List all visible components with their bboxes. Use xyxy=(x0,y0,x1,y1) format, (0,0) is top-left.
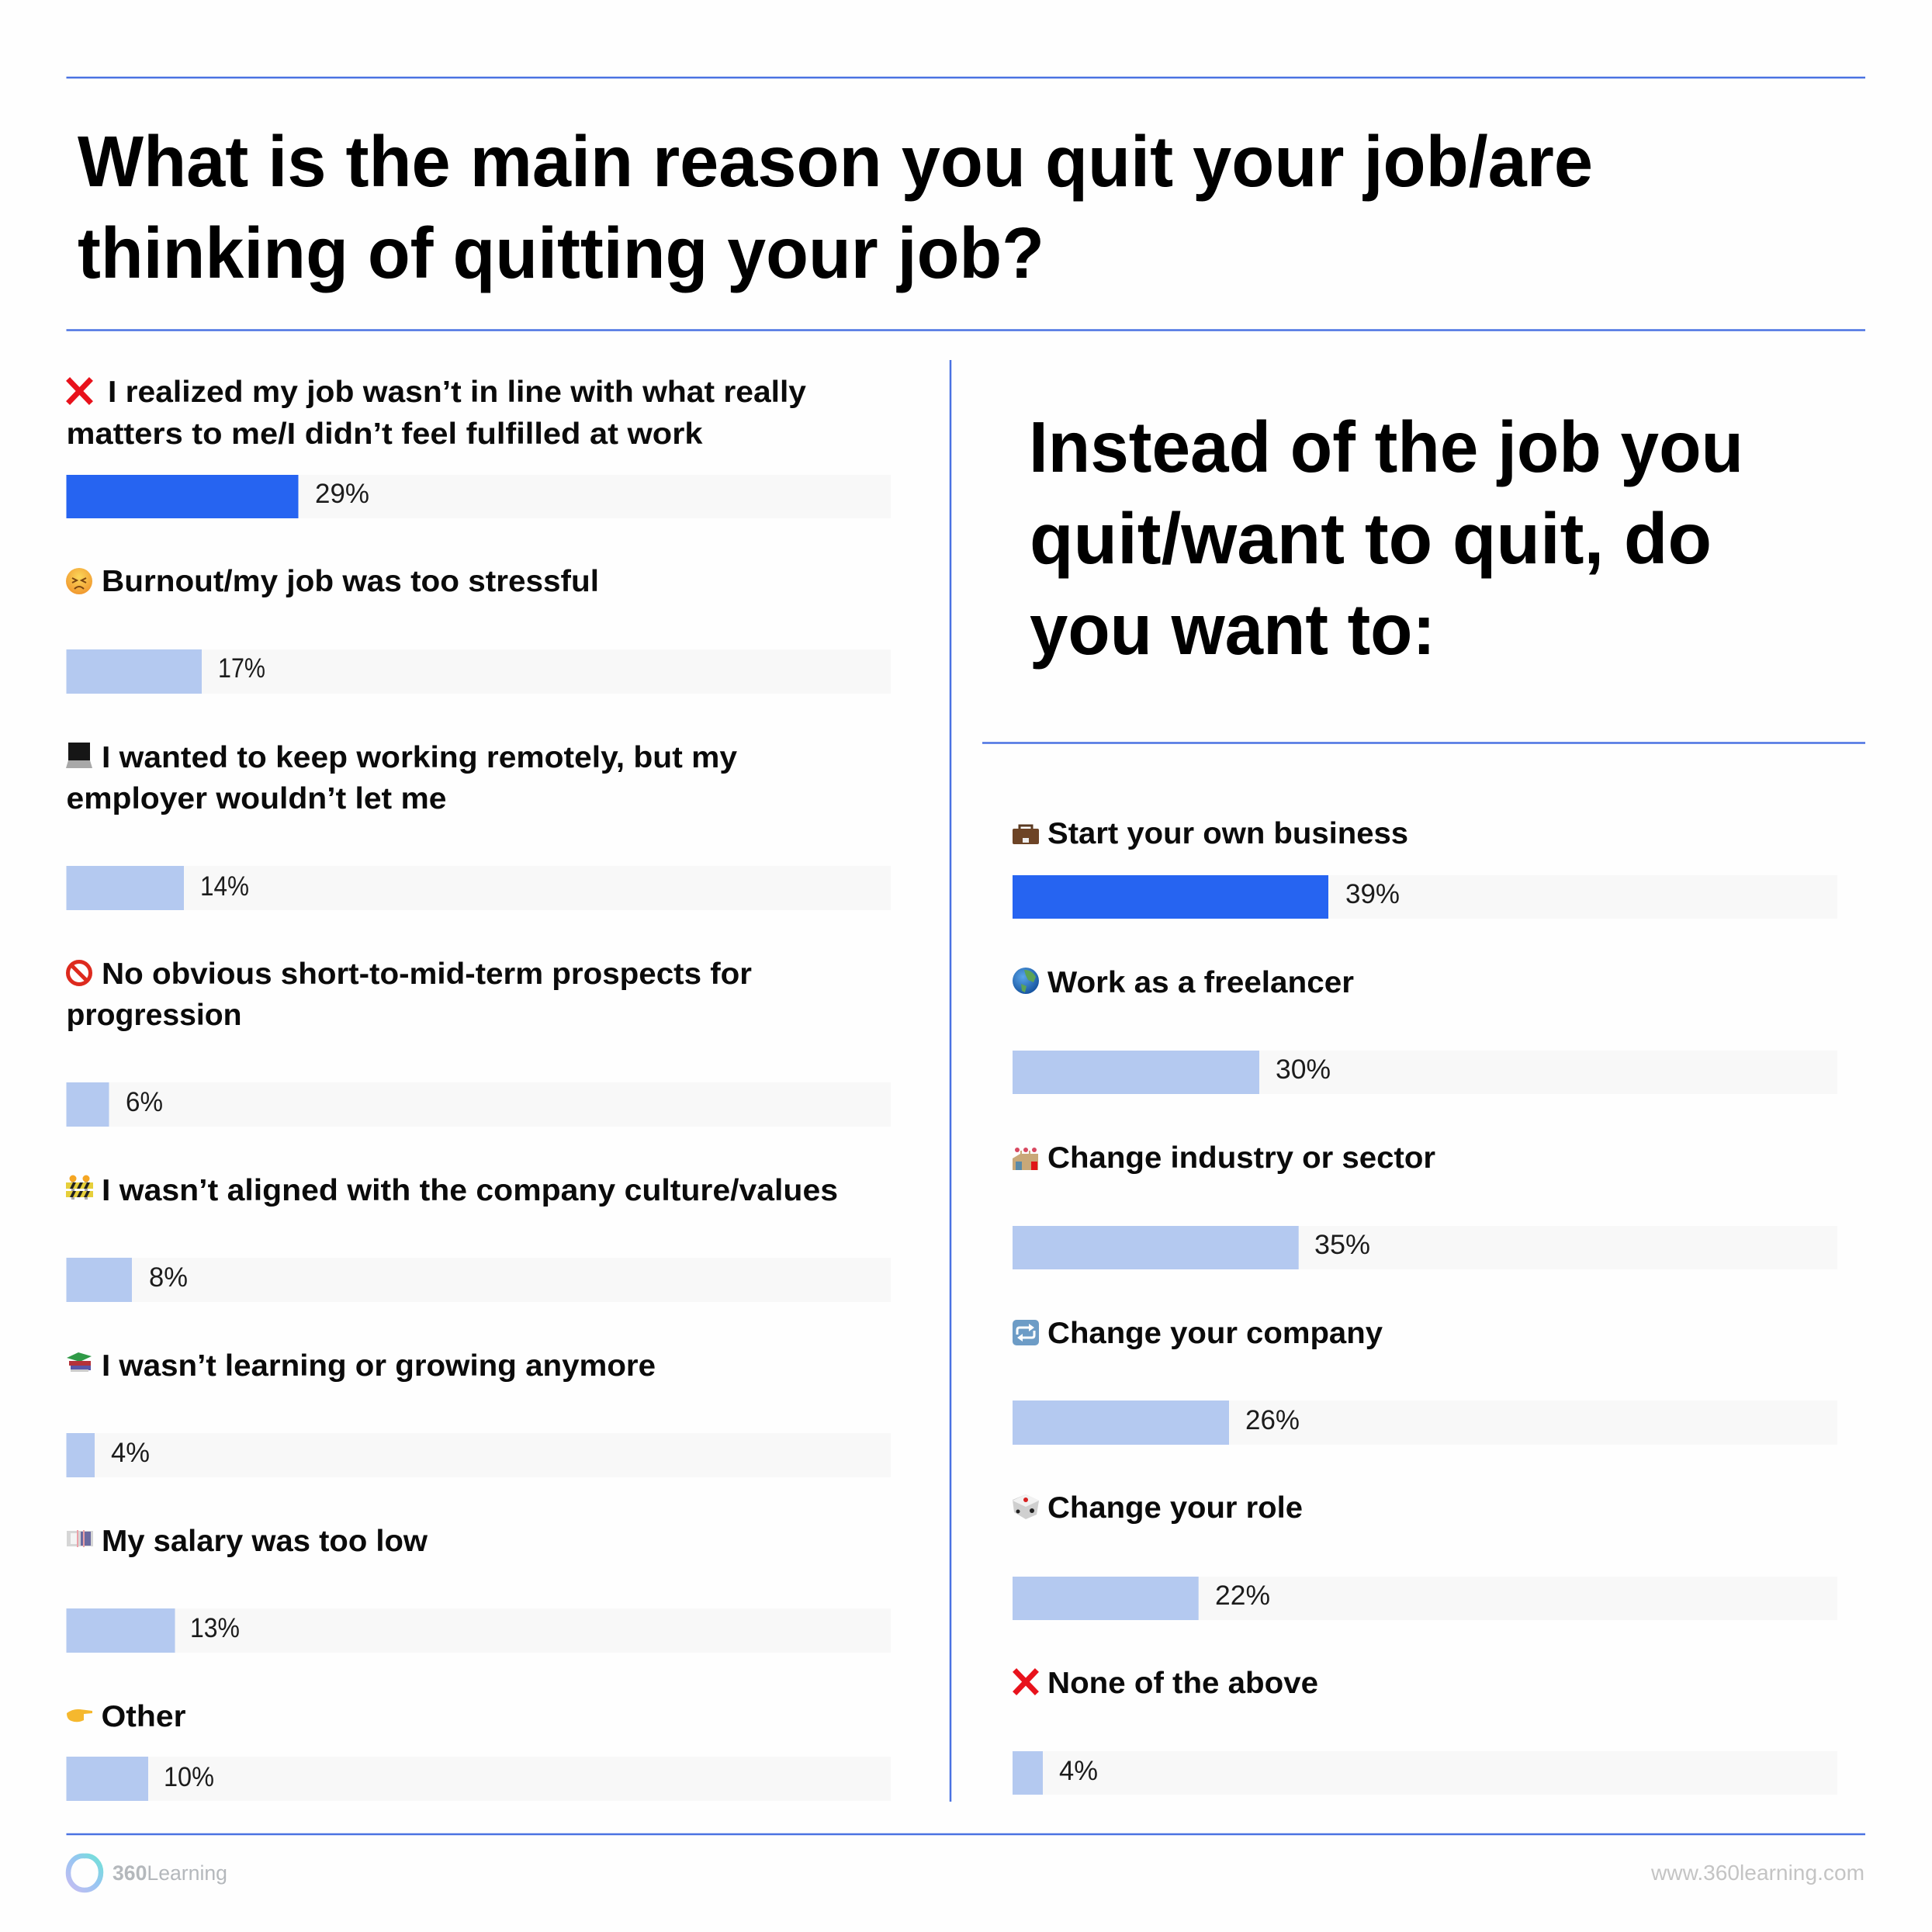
value: 4%: 4% xyxy=(111,1438,150,1468)
row: salary 13% xyxy=(67,1525,891,1653)
label: salary: My salary was too low xyxy=(102,1525,428,1558)
icon: stack of books xyxy=(67,1352,92,1372)
icon: laptop xyxy=(66,743,92,768)
icon: banknotes xyxy=(67,1530,93,1547)
bar: 4% xyxy=(1013,1751,1837,1795)
value: 4%: 4% xyxy=(1059,1756,1098,1786)
value: 13%: 13% xyxy=(190,1613,240,1643)
label: no progression: No obvious short-to-mid-term prospects for xyxy=(102,957,752,991)
row: own business 39% xyxy=(1013,817,1837,919)
row: not fulfilled 29% xyxy=(67,376,891,518)
row: no progression 6% xyxy=(67,957,891,1127)
icon: tired face xyxy=(66,568,92,594)
label: remote work xyxy=(67,741,737,815)
label: not fulfilled: matters to me/I didn’t feel fulfilled at work xyxy=(67,417,703,451)
row: none of the above 4% xyxy=(1013,1667,1837,1795)
value: 14%: 14% xyxy=(200,871,249,902)
value: 35%: 35% xyxy=(1314,1230,1370,1260)
bar: 8% xyxy=(67,1258,891,1302)
panel: reasons for quitting xyxy=(66,376,891,1801)
footer logo: 360Learning xyxy=(68,1856,227,1890)
icon: factory xyxy=(1013,1148,1038,1170)
row: change company 26% xyxy=(1013,1317,1837,1445)
label: burnout: Burnout/my job was too stressful xyxy=(102,565,599,598)
icon: road barrier xyxy=(66,1175,93,1200)
bar: 13% xyxy=(67,1608,891,1653)
row: burnout 17% xyxy=(66,565,891,694)
label: change role: Change your role xyxy=(1047,1491,1303,1525)
label: other: Other xyxy=(101,1700,186,1733)
logo wordmark: 360Learning xyxy=(113,1861,227,1885)
icon: briefcase xyxy=(1013,826,1039,844)
bar: 35% xyxy=(1013,1226,1837,1269)
value: 6%: 6% xyxy=(126,1087,163,1117)
bar: 6% xyxy=(67,1082,891,1127)
bar: 17% xyxy=(67,649,891,694)
label: change industry: Change industry or sector xyxy=(1047,1141,1435,1175)
heading: second question xyxy=(1029,407,1743,670)
bar: 4% xyxy=(67,1433,891,1477)
heading: second question: Instead of the job you xyxy=(1029,407,1743,487)
row: remote work 14% xyxy=(66,741,891,910)
value: 10%: 10% xyxy=(164,1762,214,1792)
bar: 30% xyxy=(1013,1051,1837,1094)
bar: 29% xyxy=(67,475,891,518)
value: 29%: 29% xyxy=(315,479,369,509)
icon: no entry sign xyxy=(68,962,90,984)
value: 22%: 22% xyxy=(1215,1581,1270,1611)
label: culture: I wasn’t aligned with the company culture/values xyxy=(102,1174,838,1207)
icon: pointing hand xyxy=(67,1709,92,1722)
icon: dice xyxy=(1013,1494,1039,1519)
row: learning 4% xyxy=(67,1349,891,1477)
bar: 10% xyxy=(67,1757,891,1801)
row: freelancer 30% xyxy=(1013,966,1837,1094)
title: main question: What is the main reason you quit your job/are xyxy=(78,121,1593,202)
label: no progression: progression xyxy=(67,999,242,1032)
value: 26%: 26% xyxy=(1245,1405,1300,1435)
label: remote work: I wanted to keep working remotely, but my xyxy=(102,741,737,774)
row: other 10% xyxy=(67,1700,891,1801)
label: remote work: employer wouldn’t let me xyxy=(67,782,447,815)
title: main question xyxy=(78,121,1593,293)
heading: second question: you want to: xyxy=(1030,589,1435,670)
value: 30%: 30% xyxy=(1276,1054,1331,1085)
bar: 39% xyxy=(1013,875,1837,919)
bar: 22% xyxy=(1013,1577,1837,1620)
panel: what respondents want instead xyxy=(1013,817,1837,1795)
heading: second question: quit/want to quit, do xyxy=(1030,498,1712,579)
icon: repeat button xyxy=(1013,1320,1039,1345)
bar: 26% xyxy=(1013,1401,1837,1445)
label: not fulfilled: I realized my job wasn’t in line with what really xyxy=(108,376,806,409)
label: no progression xyxy=(67,957,752,1032)
label: own business: Start your own business xyxy=(1047,817,1408,850)
value: 8%: 8% xyxy=(149,1262,188,1293)
title: main question: thinking of quitting your job? xyxy=(78,213,1044,293)
value: 39%: 39% xyxy=(1345,879,1400,909)
row: change industry 35% xyxy=(1013,1141,1837,1269)
icon: red cross xyxy=(70,381,89,401)
icon: red cross xyxy=(1016,1672,1035,1691)
icon: ring logo xyxy=(68,1856,101,1890)
label: freelancer: Work as a freelancer xyxy=(1047,966,1354,999)
label: change company: Change your company xyxy=(1047,1317,1383,1350)
row: change role 22% xyxy=(1013,1491,1837,1620)
label: not fulfilled xyxy=(67,376,806,451)
footer website url: www.360learning.com xyxy=(1650,1861,1864,1885)
row: culture 8% xyxy=(66,1174,891,1302)
label: none of the above: None of the above xyxy=(1047,1667,1318,1700)
value: 17%: 17% xyxy=(218,653,265,684)
icon: globe xyxy=(1013,968,1039,994)
label: learning: I wasn’t learning or growing anymore xyxy=(102,1349,656,1383)
bar: 14% xyxy=(67,866,891,910)
